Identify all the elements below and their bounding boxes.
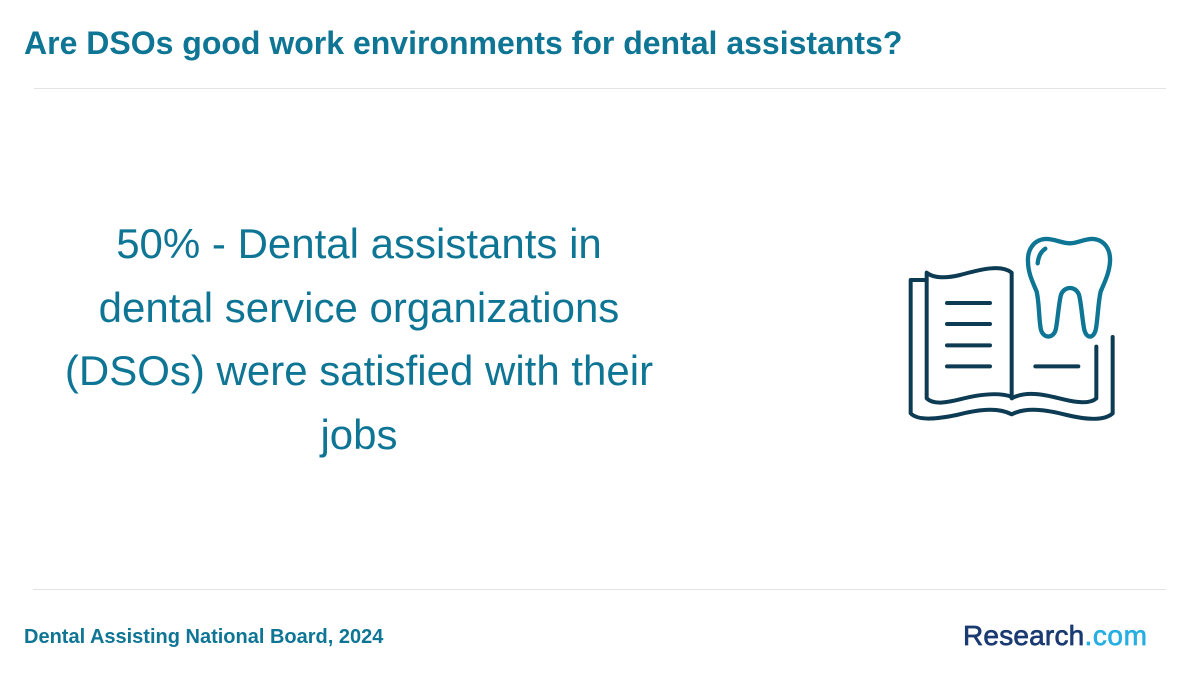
main statistic text: dental service organizations: [99, 284, 619, 330]
main statistic text: (DSOs) were satisfied with their: [65, 347, 653, 394]
icon: book with tooth: [908, 236, 1115, 421]
main statistic text: 50% - Dental assistants in: [116, 220, 602, 267]
title: Are DSOs good work environments for dental assistants?: [24, 25, 902, 61]
main statistic text: [65, 220, 653, 458]
tooth: [1028, 239, 1110, 337]
logo: Research.com: Research.com: [963, 620, 1148, 651]
open book: [911, 268, 1113, 419]
source note: Dental Assisting National Board, 2024: [24, 626, 383, 648]
main statistic text: jobs: [320, 410, 398, 458]
